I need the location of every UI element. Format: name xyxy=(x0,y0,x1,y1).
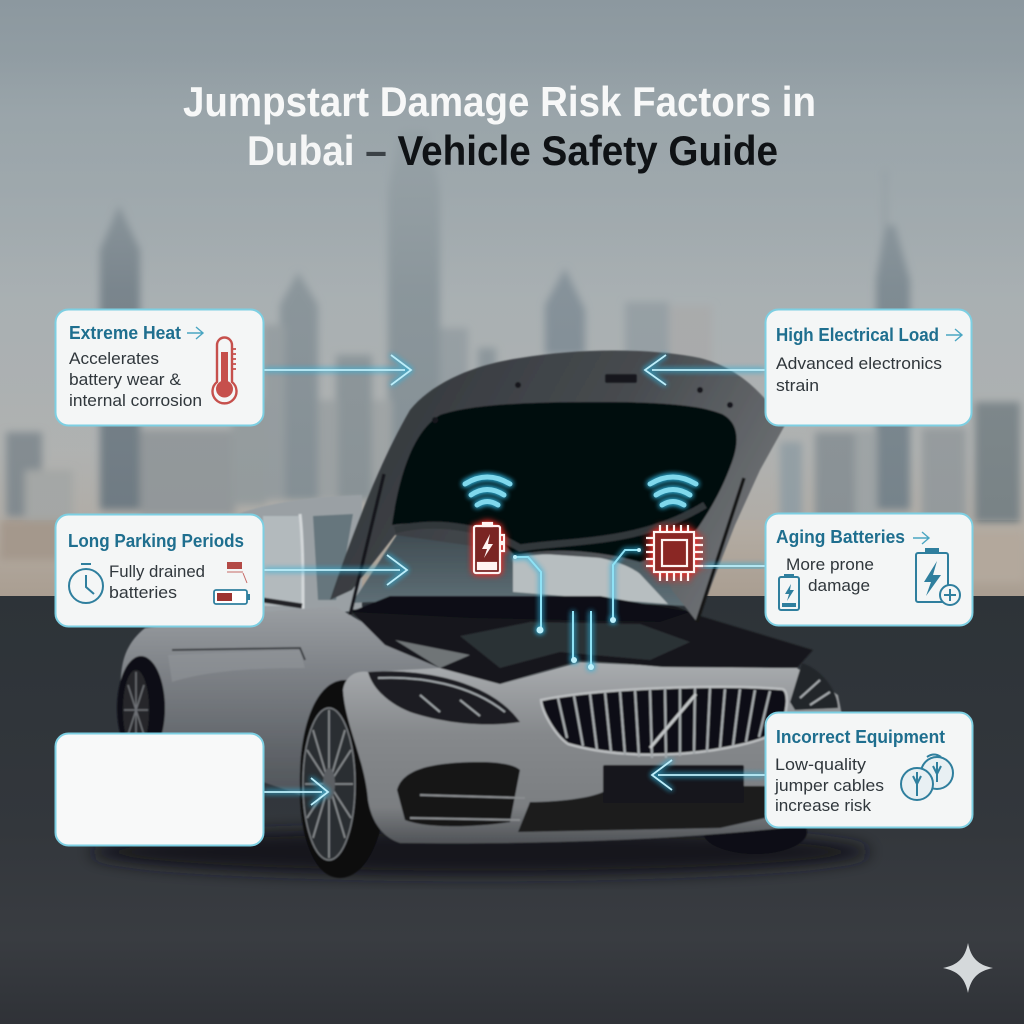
connector arrow: incorrect equipment xyxy=(652,760,765,790)
background: dark asphalt ground xyxy=(0,596,1024,1024)
icon: small battery xyxy=(779,574,799,610)
connector arrow: long parking periods xyxy=(264,555,407,585)
front fascia and bumper xyxy=(343,662,842,843)
car roof and cabin xyxy=(225,495,362,625)
small arrow xyxy=(946,329,962,341)
car side body xyxy=(121,606,520,835)
panel: aging batteries: damage xyxy=(808,576,870,595)
background: hazy sky xyxy=(0,0,1024,600)
number plate xyxy=(603,765,744,803)
title xyxy=(183,78,816,174)
body text: Advanced electronics xyxy=(776,354,942,373)
lower centre intake xyxy=(518,786,770,832)
panel: high electrical load xyxy=(766,310,972,426)
heading: extreme heat: Extreme Heat xyxy=(69,323,181,343)
icon: thermometer xyxy=(212,338,237,403)
open hood outer panel xyxy=(330,350,785,622)
windscreen below hood xyxy=(352,530,685,606)
body text: Accelerates xyxy=(69,349,159,368)
panel: long parking periods xyxy=(56,514,264,626)
right headlight xyxy=(790,663,838,710)
connector arrow: high electrical load xyxy=(645,355,765,385)
panel: extreme heat: internal corrosion xyxy=(69,391,202,410)
icon: low battery xyxy=(214,590,250,604)
car xyxy=(90,350,870,878)
icon: wifi right xyxy=(650,477,696,505)
door shoulder crease xyxy=(172,648,305,660)
panel: long parking periods: batteries xyxy=(109,583,177,602)
icon: red battery xyxy=(474,523,504,573)
left headlight xyxy=(368,671,520,724)
engine detail left xyxy=(395,640,470,668)
title: Dubai – Vehicle Safety Guide xyxy=(247,127,778,174)
panel: incorrect equipment xyxy=(766,712,972,828)
icon: red microchip xyxy=(646,525,703,581)
rear wheel xyxy=(117,656,165,760)
connector arrow: aging batteries xyxy=(672,560,765,566)
door reflection xyxy=(168,650,305,682)
icon: jumper cable clamps xyxy=(901,754,953,800)
panel: extreme heat xyxy=(56,310,264,426)
hood inner brace xyxy=(395,505,705,548)
small arrow xyxy=(187,327,203,339)
heading: incorrect equipment: Incorrect Equipment xyxy=(776,727,945,747)
panel: incorrect equipment: jumper cables xyxy=(774,776,884,795)
heading: long parking periods: Long Parking Periods xyxy=(68,531,244,551)
hood inner black panel xyxy=(392,402,737,562)
connector arrow: blank card xyxy=(264,778,328,805)
panel: high electrical load: strain xyxy=(776,376,819,395)
hood strut right xyxy=(697,478,744,622)
engine cover xyxy=(460,622,690,668)
heading: high electrical load: High Electrical Load xyxy=(776,325,939,345)
icon: large battery with plus xyxy=(916,548,960,605)
panel: aging batteries xyxy=(766,514,972,626)
small arrow xyxy=(913,532,929,544)
body text: Low-quality xyxy=(775,755,867,774)
left intake trim xyxy=(410,795,525,820)
panel: extreme heat: battery wear & xyxy=(69,370,182,389)
panel: blank card xyxy=(56,734,264,846)
grille xyxy=(541,687,787,758)
hood holes xyxy=(432,374,733,423)
connector arrow: extreme heat xyxy=(264,355,411,385)
body text: Fully drained xyxy=(109,562,205,581)
car shadow xyxy=(90,828,870,876)
background: blurred Dubai skyline xyxy=(0,60,1024,582)
icon: sparkle watermark xyxy=(943,943,993,993)
panel: incorrect equipment: increase risk xyxy=(775,796,871,815)
front wheel xyxy=(300,680,385,878)
engine bay xyxy=(350,598,813,684)
icon: stopwatch xyxy=(69,564,103,603)
icon: calendar with down arrow xyxy=(227,562,247,583)
cowl and wipers xyxy=(350,596,690,622)
far front wheel xyxy=(703,810,807,854)
heading: aging batteries: Aging Batteries xyxy=(776,527,905,547)
hood strut left xyxy=(350,474,384,615)
circuit traces xyxy=(513,548,641,670)
left lower intake xyxy=(397,762,520,826)
body text: More prone xyxy=(786,555,874,574)
icon: wifi left xyxy=(465,477,510,505)
title: Jumpstart Damage Risk Factors in xyxy=(183,78,816,125)
